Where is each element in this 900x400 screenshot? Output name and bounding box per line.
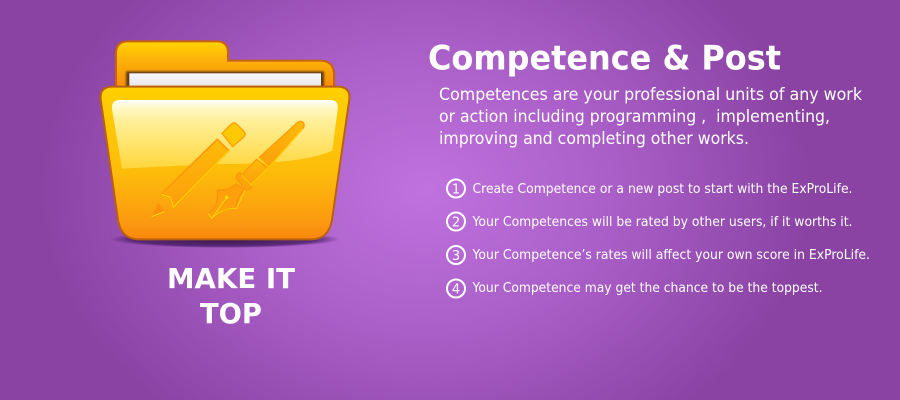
step 1: 1: [452, 182, 460, 198]
step 2: 2: [452, 216, 460, 230]
caption: make it top: [167, 262, 295, 330]
paper sheet: [126, 71, 324, 90]
intro paragraph: [439, 85, 862, 149]
icon: fountain pen: [208, 121, 304, 218]
step 4: Your Competence may get the chance to be the toppest.: [472, 281, 822, 296]
step 3: Your Competence’s rates will affect your own score in ExProLife.: [472, 248, 870, 263]
step 4: 4: [452, 282, 460, 298]
intro paragraph: Competences are your professional units of any work: [439, 85, 862, 105]
icon: pencil: [152, 123, 245, 217]
step 3: 3: [452, 249, 460, 264]
title: Competence & Post: [428, 38, 781, 78]
folder front: [101, 87, 349, 239]
caption: make it top: MAKE IT: [167, 262, 295, 295]
folder back with tab: [116, 41, 334, 90]
caption: make it top: TOP: [200, 297, 262, 330]
step 2: Your Competences will be rated by other users, if it worths it.: [472, 215, 852, 230]
icon: folder with pencil and pen: [101, 41, 349, 248]
intro paragraph: improving and completing other works.: [439, 129, 749, 149]
intro paragraph: or action including programming , implementing,: [439, 107, 830, 127]
glossy highlight: [112, 100, 338, 169]
step 1: Create Competence or a new post to start with the ExProLife.: [472, 182, 852, 197]
